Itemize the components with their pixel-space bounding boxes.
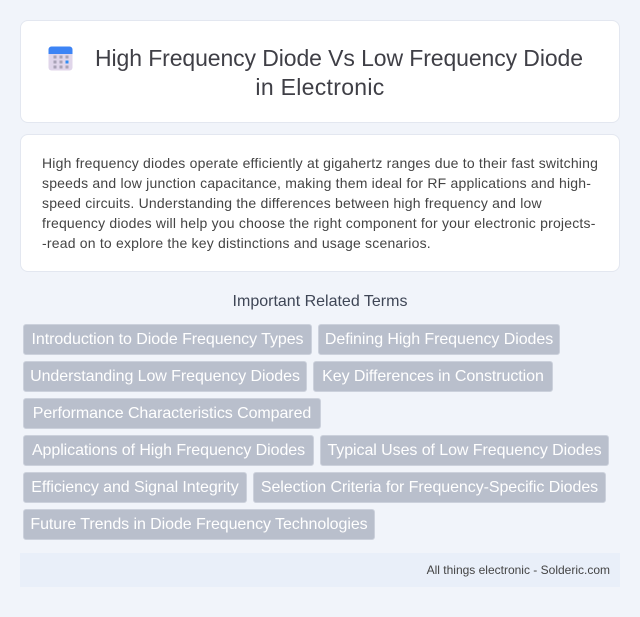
tag [320,435,609,466]
icon: calendar grid [48,46,72,70]
tag [23,361,307,392]
description text: speeds and low junction capacitance, making them ideal for RF applications and high- [42,175,591,191]
tag [23,509,375,540]
tag: Defining High Frequency Diodes [325,331,553,348]
description card [20,134,620,272]
description text: -read on to explore the key distinctions and usage scenarios. [42,235,431,251]
description text [42,155,598,251]
footer bar: All things electronic - Solderic.com [427,563,610,577]
tag: Performance Characteristics Compared [33,405,311,422]
tag list [23,324,609,540]
tag [23,324,312,355]
description text: speed circuits. Understanding the differences between high frequency and low [42,195,542,211]
related terms heading: Important Related Terms [233,293,407,310]
title: High Frequency Diode Vs Low Frequency Diode [95,45,583,71]
title: in Electronic [255,74,385,100]
tag [23,435,314,466]
title [95,45,583,100]
tag [23,472,247,503]
tag: Introduction to Diode Frequency Types [32,331,303,348]
tag: Selection Criteria for Frequency-Specific Diodes [261,479,598,496]
tag: Typical Uses of Low Frequency Diodes [327,442,602,459]
tag: Efficiency and Signal Integrity [31,479,239,496]
tag: Applications of High Frequency Diodes [32,442,305,459]
description text: High frequency diodes operate efficiently at gigahertz ranges due to their fast switching [42,155,598,171]
tag: Future Trends in Diode Frequency Technologies [30,516,368,533]
footer bar [20,553,620,587]
tag: Understanding Low Frequency Diodes [30,368,300,385]
tag [253,472,606,503]
header card [20,20,620,123]
description text: frequency diodes will help you choose the right component for your electronic projects- [42,215,596,231]
tag: Key Differences in Construction [322,368,544,385]
tag [318,324,560,355]
tag [313,361,553,392]
tag [23,398,321,429]
